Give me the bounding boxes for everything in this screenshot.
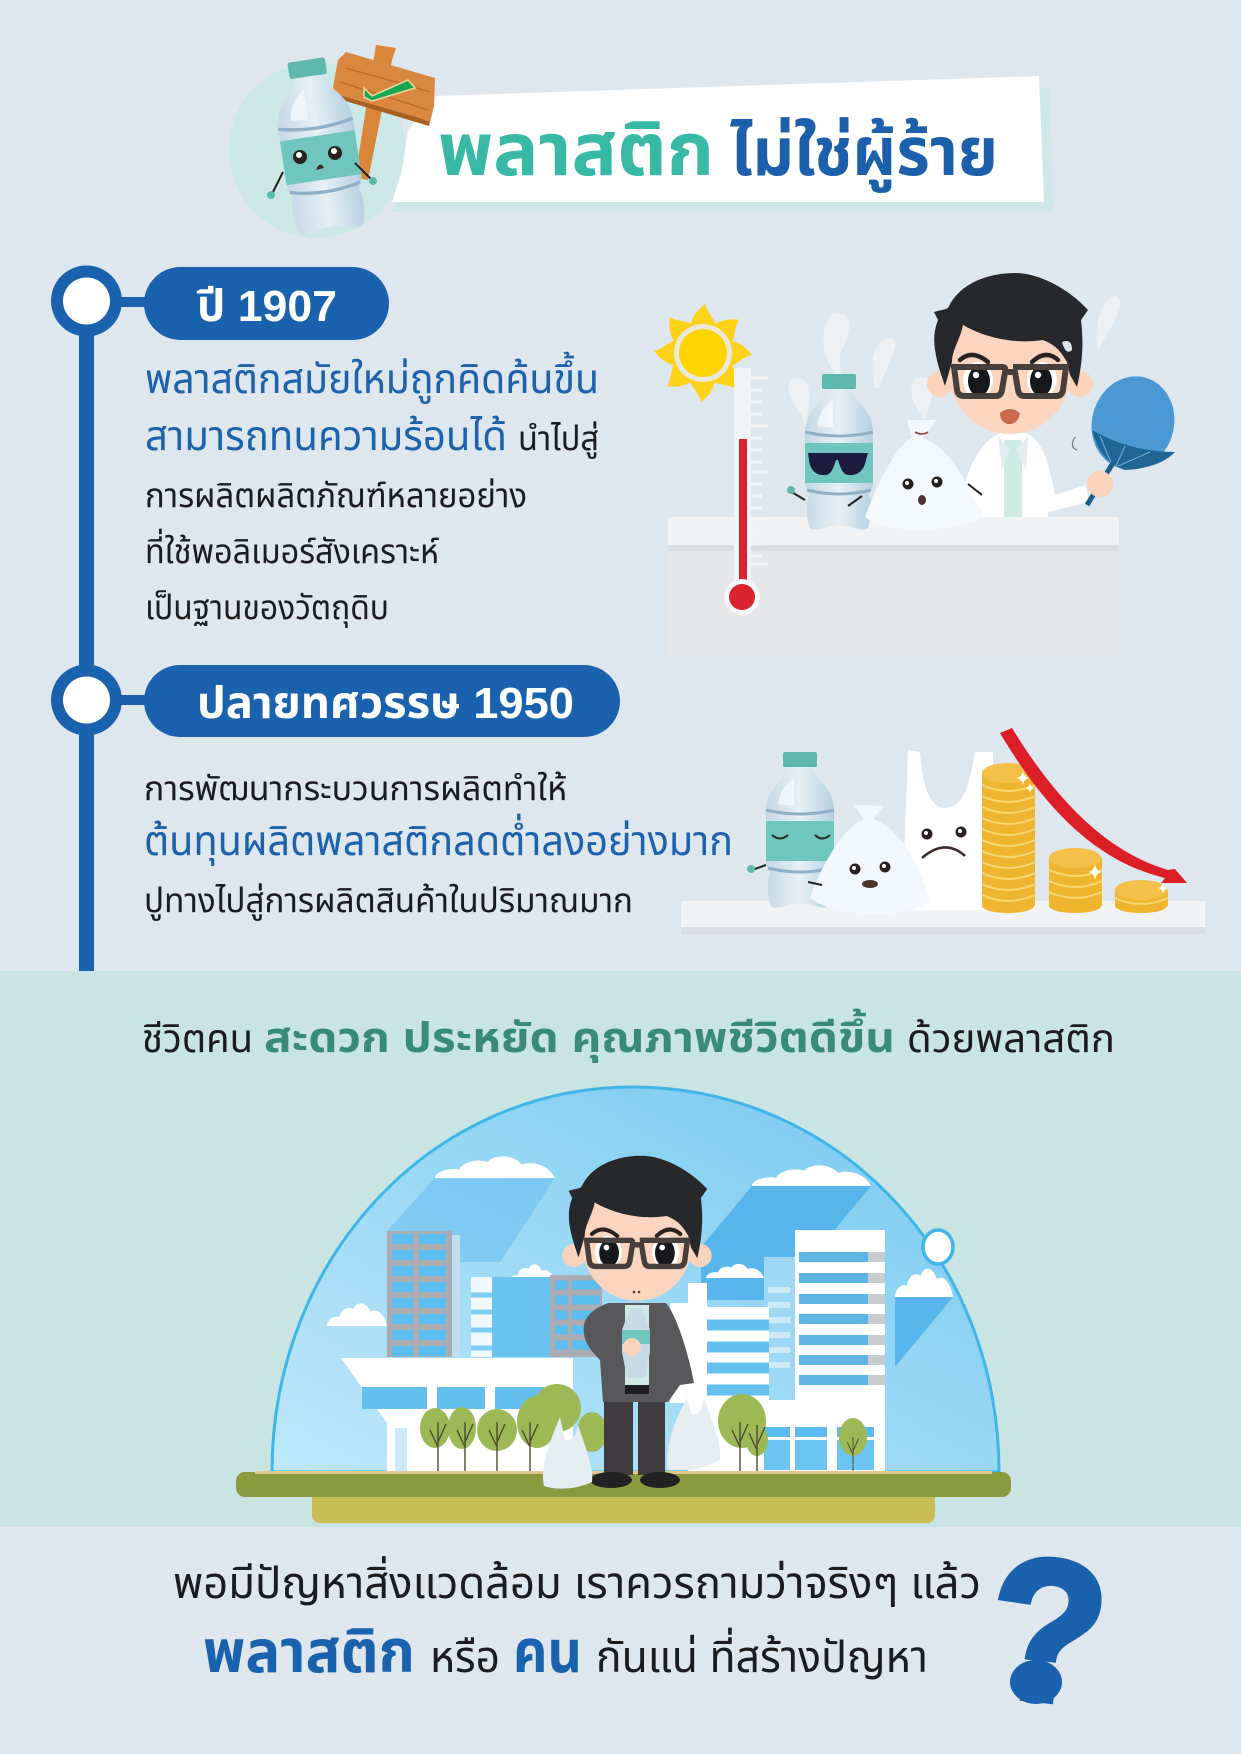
- bottle with sunglasses: [787, 374, 873, 530]
- body text 1950: การพัฒนากระบวนการผลิตทำให้: [144, 770, 567, 808]
- coin stack medium: [1049, 848, 1102, 913]
- held bottle: [622, 1308, 650, 1378]
- clouds: [327, 1156, 953, 1326]
- timeline node 1950: [51, 664, 150, 736]
- title text: ไม่ใช่ผู้ร้าย: [730, 114, 998, 193]
- closing line two: กันแน่ ที่สร้างปัญหา: [596, 1627, 928, 1682]
- man with bottle and bags: [543, 1156, 720, 1489]
- white mid building: [670, 1283, 795, 1472]
- icon: wooden sign with check mark: [332, 45, 435, 180]
- glass dome: [272, 1087, 999, 1472]
- section 1907 text: [144, 267, 599, 628]
- body text 1950: ต้นทุนผลิตพลาสติกลดต่ำลงอย่างมาก: [144, 813, 733, 866]
- background buildings: [471, 1257, 795, 1387]
- closing line two: [203, 1618, 928, 1685]
- tied bag mascot: [808, 805, 930, 914]
- year pill 1907: [144, 267, 389, 340]
- arrow: falling cost: [1000, 728, 1187, 883]
- scientist: [927, 273, 1093, 517]
- body text 1907: พลาสติกสมัยใหม่ถูกคิดค้นขึ้น: [145, 351, 599, 404]
- closing line two: พลาสติก: [203, 1618, 415, 1685]
- closing line one: พอมีปัญหาสิ่งแวดล้อม เราควรถามว่าจริงๆ แล้ว: [173, 1556, 981, 1608]
- band heading: ชีวิตคน: [142, 1018, 253, 1061]
- body text 1950: [144, 770, 733, 921]
- ground platform: [236, 1471, 1011, 1523]
- year pill 1950: ปลายทศวรรษ 1950: [197, 679, 574, 728]
- man trousers and shoes: [590, 1395, 680, 1488]
- closing question: [173, 1514, 1117, 1748]
- band: quality of life: [0, 971, 1241, 1527]
- icon: steam: [789, 296, 1121, 430]
- section 1950 text: [144, 665, 733, 921]
- man shirt: [625, 1305, 649, 1385]
- man head: [562, 1156, 712, 1301]
- cloud shadows: [387, 1178, 953, 1367]
- body text 1907: การผลิตผลิตภัณฑ์หลายอย่าง: [145, 477, 527, 515]
- grey tower left: [387, 1231, 460, 1357]
- shopping bag mascot: [902, 750, 993, 910]
- white tower right: [764, 1230, 885, 1472]
- title block: [229, 45, 1053, 238]
- illustration: falling cost scene: [681, 728, 1205, 934]
- icon: sun: [654, 304, 752, 402]
- man belt: [625, 1385, 649, 1394]
- sleeping bottle mascot: [747, 752, 834, 908]
- trees: [420, 1384, 867, 1475]
- band heading: [142, 1008, 1115, 1063]
- grey tower middle: [550, 1275, 602, 1357]
- title text: พลาสติก: [438, 108, 714, 191]
- year pill 1950: [144, 665, 620, 737]
- counter: [668, 517, 1119, 656]
- body text 1950: ปูทางไปสู่การผลิตสินค้าในปริมาณมาก: [144, 882, 633, 921]
- shelf: [681, 901, 1205, 934]
- coin stack short: [1115, 880, 1168, 913]
- city dome illustration: [236, 1087, 1011, 1523]
- right shopping bag: [667, 1398, 720, 1470]
- icon: thermometer: [724, 368, 768, 615]
- man jacket: [584, 1303, 694, 1402]
- title mascot circle: [229, 62, 405, 238]
- timeline node 1907: [51, 266, 150, 336]
- coin stack tall: [982, 763, 1035, 913]
- dome knob: [923, 1230, 953, 1264]
- icon: question mark: ?: [979, 1514, 1117, 1748]
- body text 1907: เป็นฐานของวัตถุดิบ: [145, 589, 389, 628]
- low white building: [341, 1358, 573, 1472]
- illustration: heat lab scene: [654, 273, 1185, 656]
- band heading: สะดวก ประหยัด คุณภาพชีวิตดีขึ้น: [264, 1008, 895, 1063]
- title banner shadow: [392, 87, 1053, 212]
- left shopping bag: [543, 1417, 592, 1489]
- year pill 1907: ปี 1907: [196, 282, 337, 331]
- body text 1907: สามารถทนความร้อนได้: [145, 413, 507, 459]
- title text: [438, 108, 998, 193]
- closing line two: คน: [513, 1618, 582, 1685]
- title bottle mascot: [267, 54, 377, 236]
- plastic bag mascot: [865, 420, 983, 530]
- band heading: ด้วยพลาสติก: [907, 1018, 1115, 1061]
- icon: hand fan: [1072, 367, 1185, 505]
- coin stacks: [982, 763, 1168, 913]
- closing line two: หรือ: [430, 1633, 500, 1682]
- timeline spine: [79, 300, 94, 971]
- body text 1907: ที่ใช้พอลิเมอร์สังเคราะห์: [145, 528, 440, 571]
- body text 1907: นำไปสู่: [518, 420, 599, 459]
- title banner: [392, 76, 1044, 202]
- body text 1907: [145, 351, 599, 628]
- timeline: [51, 266, 150, 971]
